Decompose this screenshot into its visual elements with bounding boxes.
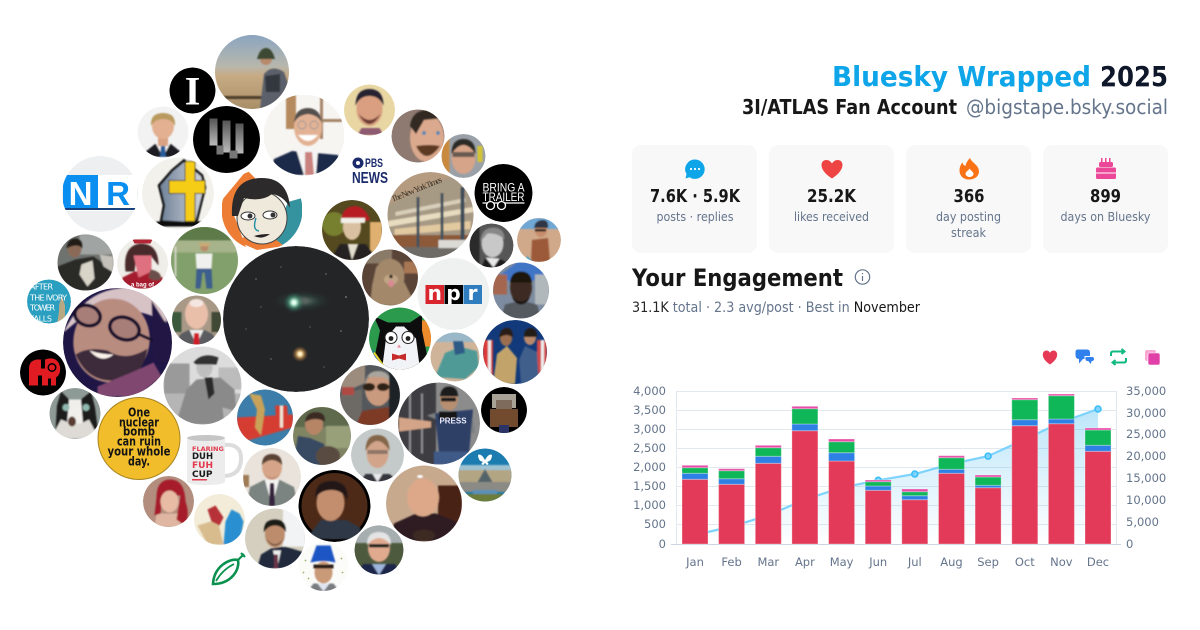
left axis labels: 500	[644, 517, 666, 531]
left axis labels: 0	[659, 537, 666, 551]
avatar: bishop mitre	[142, 158, 214, 230]
avatar: man with cat by trees	[293, 407, 351, 466]
avatar: bald man in dark shirt	[386, 466, 462, 542]
avatar: cartoon cat	[369, 308, 432, 370]
avatar: One nuclear bomb button: nuclear	[119, 416, 159, 430]
avatar: cartoon face	[222, 170, 302, 250]
month labels: Feb	[721, 555, 742, 569]
icon: likes	[1043, 350, 1057, 364]
month labels: Aug	[940, 555, 963, 569]
avatar: man with black ring	[298, 470, 370, 542]
left axis labels: 3,500	[633, 403, 666, 417]
avatar: red plane illustration	[237, 390, 293, 446]
avatar: red elephant logo	[20, 350, 66, 396]
stat card: posting streak	[906, 145, 1031, 253]
cumulative line	[695, 409, 1098, 535]
mug: Flaring Duh Fuh Cup	[187, 435, 241, 485]
avatar: After the Ivory Tower Falls: FALLS	[30, 314, 52, 324]
left axis labels: 4,000	[633, 384, 666, 398]
stacked bars	[682, 394, 1111, 544]
avatar: One nuclear bomb button: day.	[128, 454, 150, 468]
avatar: New York Times building: The New York Times	[390, 174, 443, 204]
mug: Flaring Duh Fuh Cup: FLARING	[192, 445, 224, 453]
month labels: Apr	[795, 555, 815, 569]
avatar: man in dark coat	[58, 234, 114, 290]
icon: info	[855, 270, 870, 284]
mug: Flaring Duh Fuh Cup: DUH	[192, 452, 213, 462]
stat card: posting streak: streak	[951, 226, 986, 240]
avatar: laughing man by cross	[264, 95, 344, 175]
left axis labels: 3,000	[633, 422, 666, 436]
avatar: red-haired woman	[143, 476, 194, 528]
legend icons	[1043, 349, 1160, 365]
avatar: Kamala Harris handshake	[483, 320, 547, 384]
avatar: Louvre with butterfly	[458, 448, 512, 502]
avatar: NPR logo: r	[468, 281, 478, 305]
icon: reposts	[1111, 349, 1126, 365]
avatar: curly dog	[362, 250, 418, 306]
avatar: One nuclear bomb button: One	[128, 406, 150, 420]
right axis labels: 20,000	[1126, 449, 1166, 463]
cumulative area	[695, 409, 1098, 544]
left axis labels: 2,500	[633, 441, 666, 455]
avatar: NR logo	[62, 156, 138, 232]
avatar: minecraft character	[481, 387, 527, 433]
right axis labels: 0	[1126, 537, 1133, 551]
avatar: beach art	[430, 332, 480, 382]
month labels: Jan	[685, 555, 704, 569]
comet photo	[223, 246, 369, 392]
avatar: NPR logo	[418, 258, 490, 330]
avatar: black and white man	[470, 224, 514, 268]
right axis labels: 5,000	[1126, 515, 1159, 529]
avatar: Bring a Trailer logo	[474, 164, 532, 222]
avatar: man with glasses and colourful background	[442, 134, 486, 178]
avatar: pin-up cartoon: a bag of	[131, 282, 155, 288]
avatar: military officer photo	[164, 346, 242, 424]
avatar: Bring a Trailer logo: BRING A	[482, 180, 524, 194]
avatar: blond man in suit	[138, 106, 188, 158]
avatar: NR logo: N	[69, 175, 92, 212]
left axis labels	[633, 384, 666, 551]
heading: Your Engagement: Your Engagement	[631, 264, 843, 292]
mug: Flaring Duh Fuh Cup: FUH	[192, 461, 213, 471]
avatar: After the Ivory Tower Falls: AFTER	[30, 282, 53, 292]
chart: monthly engagement	[633, 384, 1166, 569]
stat card: posts and replies	[632, 145, 757, 253]
avatar: man with glasses gray background	[351, 428, 404, 482]
avatar: New York Times building	[388, 172, 474, 259]
stat card: likes received: 25.2K	[807, 186, 857, 207]
avatar: goblin illustration	[194, 494, 245, 545]
avatar: man in party hat	[299, 542, 348, 592]
avatar: One nuclear bomb button: bomb	[123, 424, 155, 438]
month labels: Jun	[868, 555, 887, 569]
logo: PBS News: PBS	[365, 158, 383, 170]
stat card: days on Bluesky: days on Bluesky	[1060, 210, 1150, 224]
avatar: man overlooking landscape	[215, 35, 289, 109]
title	[832, 60, 1168, 93]
engagement summary: 31.1K total · 2.3 avg/post · Best in November	[632, 300, 920, 316]
avatar: NPR logo: p	[446, 281, 461, 305]
month labels: Mar	[757, 555, 779, 569]
stat card: posts and replies: posts · replies	[656, 210, 734, 224]
avatar: press reporter: PRESS	[439, 416, 467, 426]
left axis labels: 2,000	[633, 460, 666, 474]
avatar: One nuclear bomb button	[98, 398, 180, 480]
stat card: days on Bluesky	[1043, 145, 1168, 253]
panel: avatar cluster	[20, 35, 561, 592]
right axis labels: 30,000	[1126, 406, 1166, 420]
logo: PBS News: NEWS	[352, 170, 388, 187]
icon: quotes	[1145, 350, 1160, 365]
stat card: posting streak: 366	[954, 186, 984, 207]
month labels: Dec	[1087, 555, 1109, 569]
avatar: One nuclear bomb button: your whole	[108, 444, 170, 458]
title: Bluesky Wrapped: Bluesky Wrapped	[832, 60, 1091, 93]
title: 2025: 2025	[1100, 60, 1168, 93]
stat card: days on Bluesky: 899	[1090, 186, 1121, 207]
avatar: man in field	[170, 226, 238, 294]
month labels: Nov	[1050, 555, 1073, 569]
avatar: Independent I logo: I	[185, 68, 200, 114]
logo: PBS News	[352, 158, 388, 187]
avatar: smiling man with glasses	[63, 288, 172, 397]
mug: Flaring Duh Fuh Cup: CUP	[192, 470, 213, 480]
avatar: man in Santa hat	[322, 200, 382, 260]
icon: flame	[960, 158, 979, 180]
gridlines	[671, 391, 1121, 544]
month labels: Oct	[1015, 555, 1035, 569]
stat card: likes received: likes received	[794, 210, 869, 224]
stat card: posting streak: day posting	[936, 210, 1001, 224]
left axis labels: 1,500	[633, 479, 666, 493]
icon: replies	[1076, 350, 1094, 365]
month labels: Sep	[977, 555, 999, 569]
icon: birthday cake	[1096, 158, 1116, 179]
month labels: Jul	[907, 555, 922, 569]
handle: @bigstape.bsky.social	[966, 95, 1168, 119]
avatar: man in hoodie	[493, 262, 549, 318]
avatar: One nuclear bomb button: can ruin	[117, 434, 161, 448]
avatar: After the Ivory Tower Falls: TOWER	[29, 304, 55, 312]
right axis labels: 15,000	[1126, 471, 1166, 485]
avatar: gray haired man	[354, 525, 404, 575]
avatar: woman at beach	[517, 218, 561, 262]
avatar: bearded man in suit	[245, 508, 305, 568]
avatar: smiling man in gray suit	[243, 448, 301, 506]
right axis labels: 25,000	[1126, 427, 1166, 441]
avatar: man with goatee	[392, 110, 444, 162]
avatar: After the Ivory Tower Falls: THE IVORY	[29, 294, 67, 302]
icon: heart	[822, 160, 842, 178]
avatar: After the Ivory Tower Falls	[27, 280, 71, 324]
avatar: surprised cat	[50, 388, 100, 439]
cumulative points	[692, 406, 1101, 538]
avatar: Bring a Trailer logo: TRAILER	[482, 190, 525, 204]
right axis labels: 35,000	[1126, 384, 1166, 398]
logo: The Onion	[213, 553, 245, 584]
icon: chat bubble	[685, 159, 705, 179]
month labels: May	[830, 555, 854, 569]
left axis labels: 1,000	[633, 498, 666, 512]
avatar: man with beard on yellow	[344, 84, 395, 136]
avatar: NR logo: R	[106, 175, 130, 212]
right axis labels	[1126, 384, 1166, 551]
avatar: W logo on black	[193, 106, 260, 173]
avatar: Independent I logo	[170, 68, 216, 114]
avatar: pin-up cartoon	[117, 238, 168, 289]
avatar: bald man red tie	[172, 296, 222, 345]
stat card: posts and replies: 7.6K · 5.9K	[650, 186, 741, 207]
stat card: likes received	[769, 145, 894, 253]
month labels	[685, 555, 1109, 569]
avatar: press reporter	[398, 382, 480, 464]
right axis labels: 10,000	[1126, 493, 1166, 507]
display name: 3I/ATLAS Fan Account	[742, 95, 957, 119]
avatar: NPR logo: n	[428, 281, 442, 305]
avatar: man with sunglasses	[340, 365, 400, 425]
